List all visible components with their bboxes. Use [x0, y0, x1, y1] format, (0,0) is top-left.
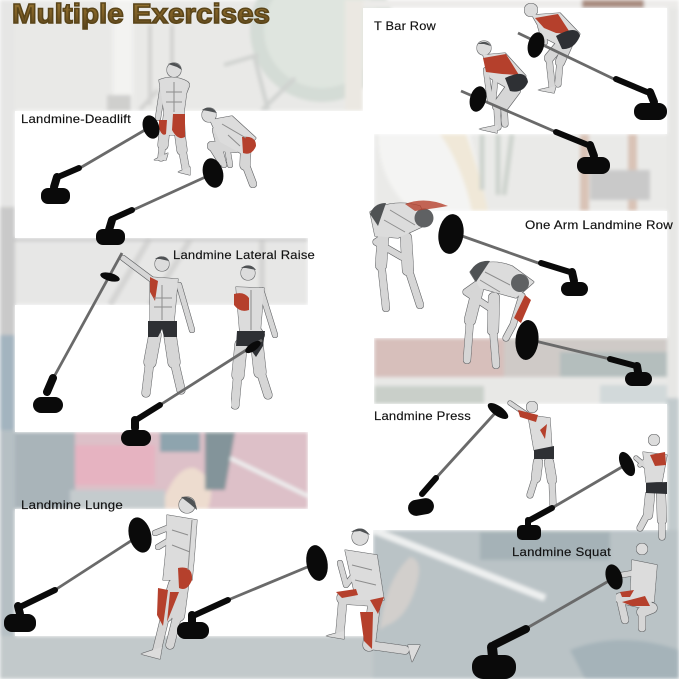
icon: plate: [99, 271, 121, 283]
figure: t bar row top: [524, 4, 580, 93]
landmine: press b: [517, 449, 638, 540]
figure: deadlift bent: [202, 108, 256, 184]
figure: press a: [510, 402, 554, 505]
heading: landmine lateral raise: Landmine Lateral Raise: [173, 248, 315, 262]
photo: pink gym: [15, 432, 308, 509]
icon: plate: [467, 84, 489, 114]
landmine: lateral raise b: [121, 339, 263, 446]
figure: one arm row b: [466, 261, 534, 365]
landmine: t bar row top: [518, 30, 667, 120]
panel: one arm landmine row: [363, 211, 673, 338]
figure: lunge b: [326, 529, 420, 662]
icon: plate: [199, 156, 227, 190]
panel: landmine lunge: [15, 498, 373, 636]
photo: lateral band: [15, 238, 308, 305]
landmine: press a: [407, 400, 511, 517]
figure: one arm row a: [370, 200, 448, 308]
icon: plate: [602, 562, 626, 592]
icon: plate: [514, 319, 540, 361]
heading: landmine lunge: Landmine Lunge: [21, 498, 123, 512]
figure: lunge a: [141, 497, 197, 659]
panel: landmine lateral raise: [15, 248, 315, 432]
landmine: one arm row b: [514, 319, 652, 386]
landmine: deadlift 1: [41, 113, 162, 204]
figure: lateral raise b: [234, 265, 275, 405]
photo: top left gym: [0, 0, 394, 111]
panel: t bar row: [363, 8, 667, 134]
landmine: squat: [472, 562, 626, 679]
heading: t bar row: T Bar Row: [374, 19, 436, 33]
figure: press b: [636, 434, 667, 537]
icon: plate: [485, 400, 511, 422]
photo: bottom floor: [0, 530, 679, 679]
panel: landmine press: [363, 404, 667, 530]
heading: one arm landmine row: One Arm Landmine Row: [525, 218, 673, 232]
panel: landmine deadlift: [15, 111, 363, 238]
icon: plate: [140, 113, 162, 141]
heading: landmine deadlift: Landmine-Deadlift: [21, 112, 131, 126]
photo: top strip: [363, 0, 679, 8]
landmine: t bar row front: [461, 84, 610, 174]
figure: t bar row front: [477, 41, 528, 133]
landmine: lateral raise a: [33, 253, 122, 413]
icon: plate: [616, 449, 638, 479]
photo: gym brick wall: [374, 338, 667, 404]
photo: woman and bands: [374, 134, 667, 211]
icon: plate: [436, 212, 466, 256]
photo: right strip: [667, 8, 679, 533]
heading: landmine squat: Landmine Squat: [512, 545, 612, 559]
figure: deadlift standing: [154, 63, 190, 175]
icon: plate: [125, 515, 155, 555]
icon: plate: [243, 339, 263, 355]
photo: left rack strip: [0, 0, 15, 640]
landmine: one arm row a: [436, 212, 588, 296]
landmine: deadlift 2: [96, 156, 227, 245]
figure: squat: [620, 544, 657, 628]
heading: landmine press: Landmine Press: [374, 409, 471, 423]
icon: plate: [525, 30, 547, 60]
icon: plate: [304, 543, 330, 583]
landmine: lunge b: [177, 543, 330, 639]
landmine: lunge a: [4, 515, 155, 632]
figure: lateral raise a: [123, 256, 192, 393]
